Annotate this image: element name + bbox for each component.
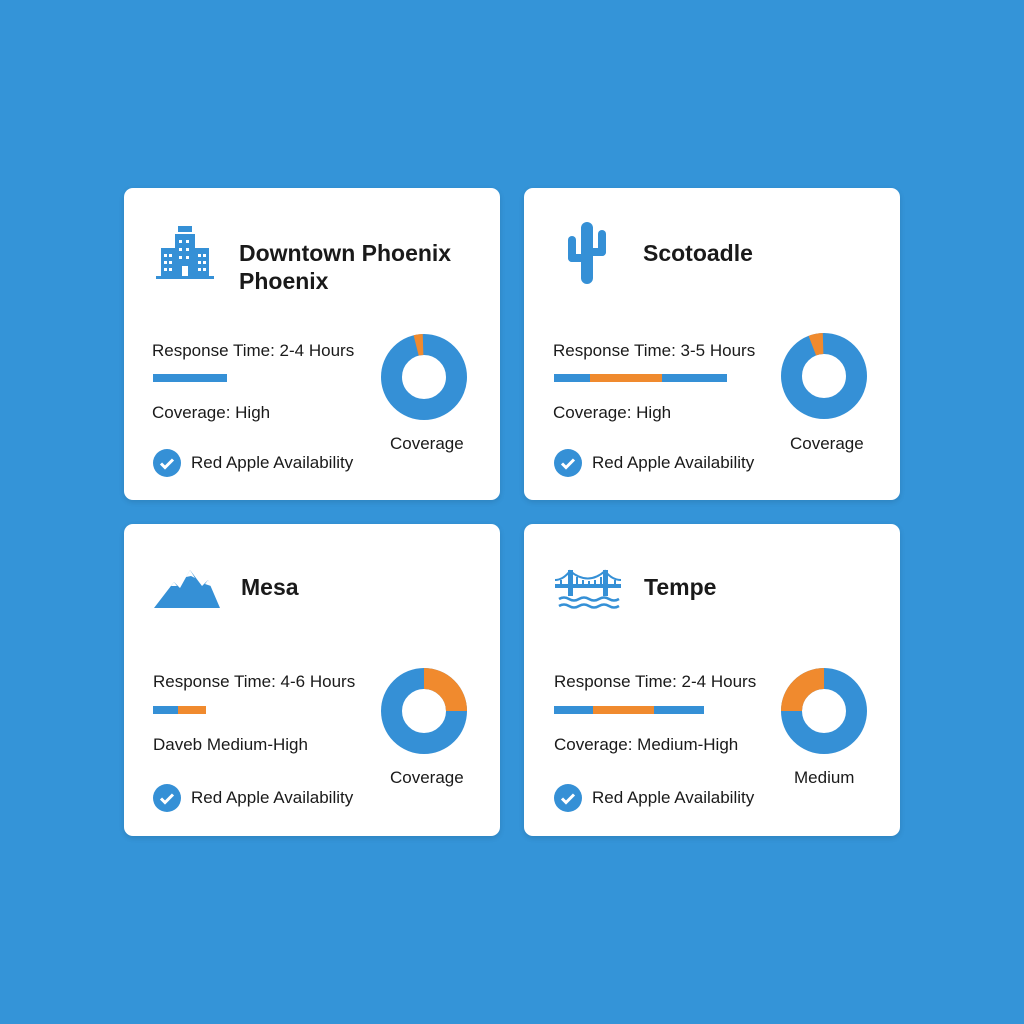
donut chart	[381, 668, 467, 754]
heading: Mesa	[241, 574, 299, 600]
text: coverage: Coverage: Medium-High	[554, 735, 738, 754]
icon: buildings	[156, 226, 214, 279]
donut chart	[781, 668, 867, 754]
check item: Red Apple Availability	[191, 453, 353, 472]
heading: Scotoadle	[643, 240, 753, 266]
heading: Tempe	[644, 574, 716, 600]
bar: response	[554, 374, 727, 382]
check item	[153, 784, 354, 812]
donut chart	[381, 334, 467, 420]
check item: Red Apple Availability	[191, 788, 353, 807]
text: coverage: Coverage: High	[553, 403, 671, 422]
bar: response	[153, 374, 227, 382]
heading: Phoenix	[239, 268, 328, 294]
check item: Red Apple Availability	[592, 453, 754, 472]
panel: Tempe	[524, 524, 900, 836]
donut chart	[781, 333, 867, 419]
text: response time: Response Time: 3-5 Hours	[553, 341, 755, 360]
chart label: Coverage	[390, 434, 464, 453]
text: coverage: Coverage: High	[152, 403, 270, 422]
icon: mountains	[154, 570, 220, 608]
panel: Downtown Phoenix	[124, 188, 500, 500]
bar: response	[554, 706, 704, 714]
text: response time: Response Time: 2-4 Hours	[554, 672, 756, 691]
text: coverage: Daveb Medium-High	[153, 735, 308, 754]
bar: response	[153, 706, 206, 714]
panel: Scotoadle	[524, 188, 900, 500]
check item	[554, 784, 754, 812]
heading	[239, 240, 451, 294]
text: response time: Response Time: 2-4 Hours	[152, 341, 354, 360]
check item	[153, 449, 354, 477]
icon: cactus	[568, 222, 606, 284]
chart label: Medium	[794, 768, 854, 787]
heading: Downtown Phoenix	[239, 240, 451, 266]
text: response time: Response Time: 4-6 Hours	[153, 672, 355, 691]
icon: bridge	[555, 570, 621, 609]
panel: Mesa	[124, 524, 500, 836]
chart label: Coverage	[390, 768, 464, 787]
chart label: Coverage	[790, 434, 864, 453]
check item	[554, 449, 754, 477]
check item: Red Apple Availability	[592, 788, 754, 807]
